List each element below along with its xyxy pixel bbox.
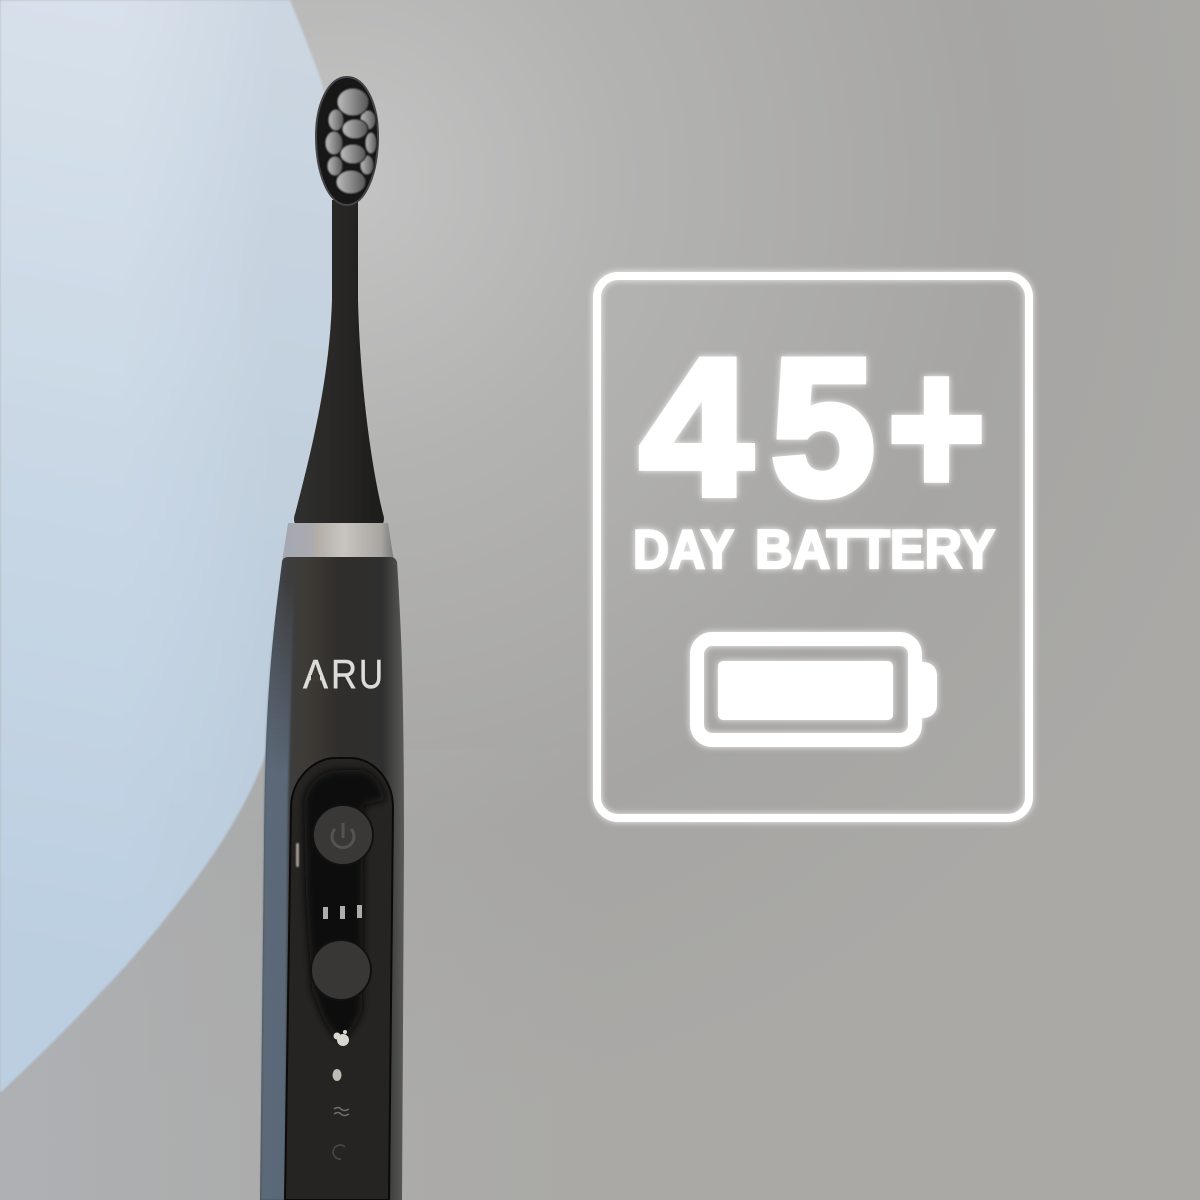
- gloss highlight: [296, 843, 299, 867]
- big number: 5: [771, 319, 875, 536]
- icon: crescent mode: [332, 1069, 342, 1081]
- brush head: [316, 77, 378, 205]
- power button: [313, 805, 373, 865]
- power symbol: [332, 823, 354, 848]
- label: DAY: [633, 518, 733, 580]
- big number: 4: [640, 319, 752, 536]
- toothbrush: [260, 77, 404, 1200]
- brush neck: [294, 200, 384, 529]
- battery badge: [597, 276, 1029, 818]
- icon: waves: [334, 1108, 349, 1116]
- icon: faint arc: [333, 1145, 345, 1159]
- mode button: [311, 940, 371, 1000]
- glossy black strip: [304, 770, 385, 1040]
- ARU logo: R: [331, 651, 357, 697]
- handle body: [260, 557, 404, 1200]
- metal collar: [282, 523, 394, 562]
- bristle tufts: [325, 88, 377, 194]
- icon: battery: [697, 639, 937, 740]
- badge frame: [597, 276, 1029, 818]
- ARU logo: U: [359, 651, 383, 697]
- control panel: [285, 758, 393, 1200]
- mode indicator bars: [323, 905, 362, 919]
- pale blue disc: [0, 0, 338, 1093]
- ARU logo: A: [303, 651, 329, 697]
- big number: +: [888, 319, 985, 536]
- label: BATTERY: [755, 518, 995, 580]
- icon: bubbles: [334, 1030, 349, 1046]
- blue reflection on handle edge: [261, 580, 294, 1200]
- ARU logo: [303, 651, 383, 697]
